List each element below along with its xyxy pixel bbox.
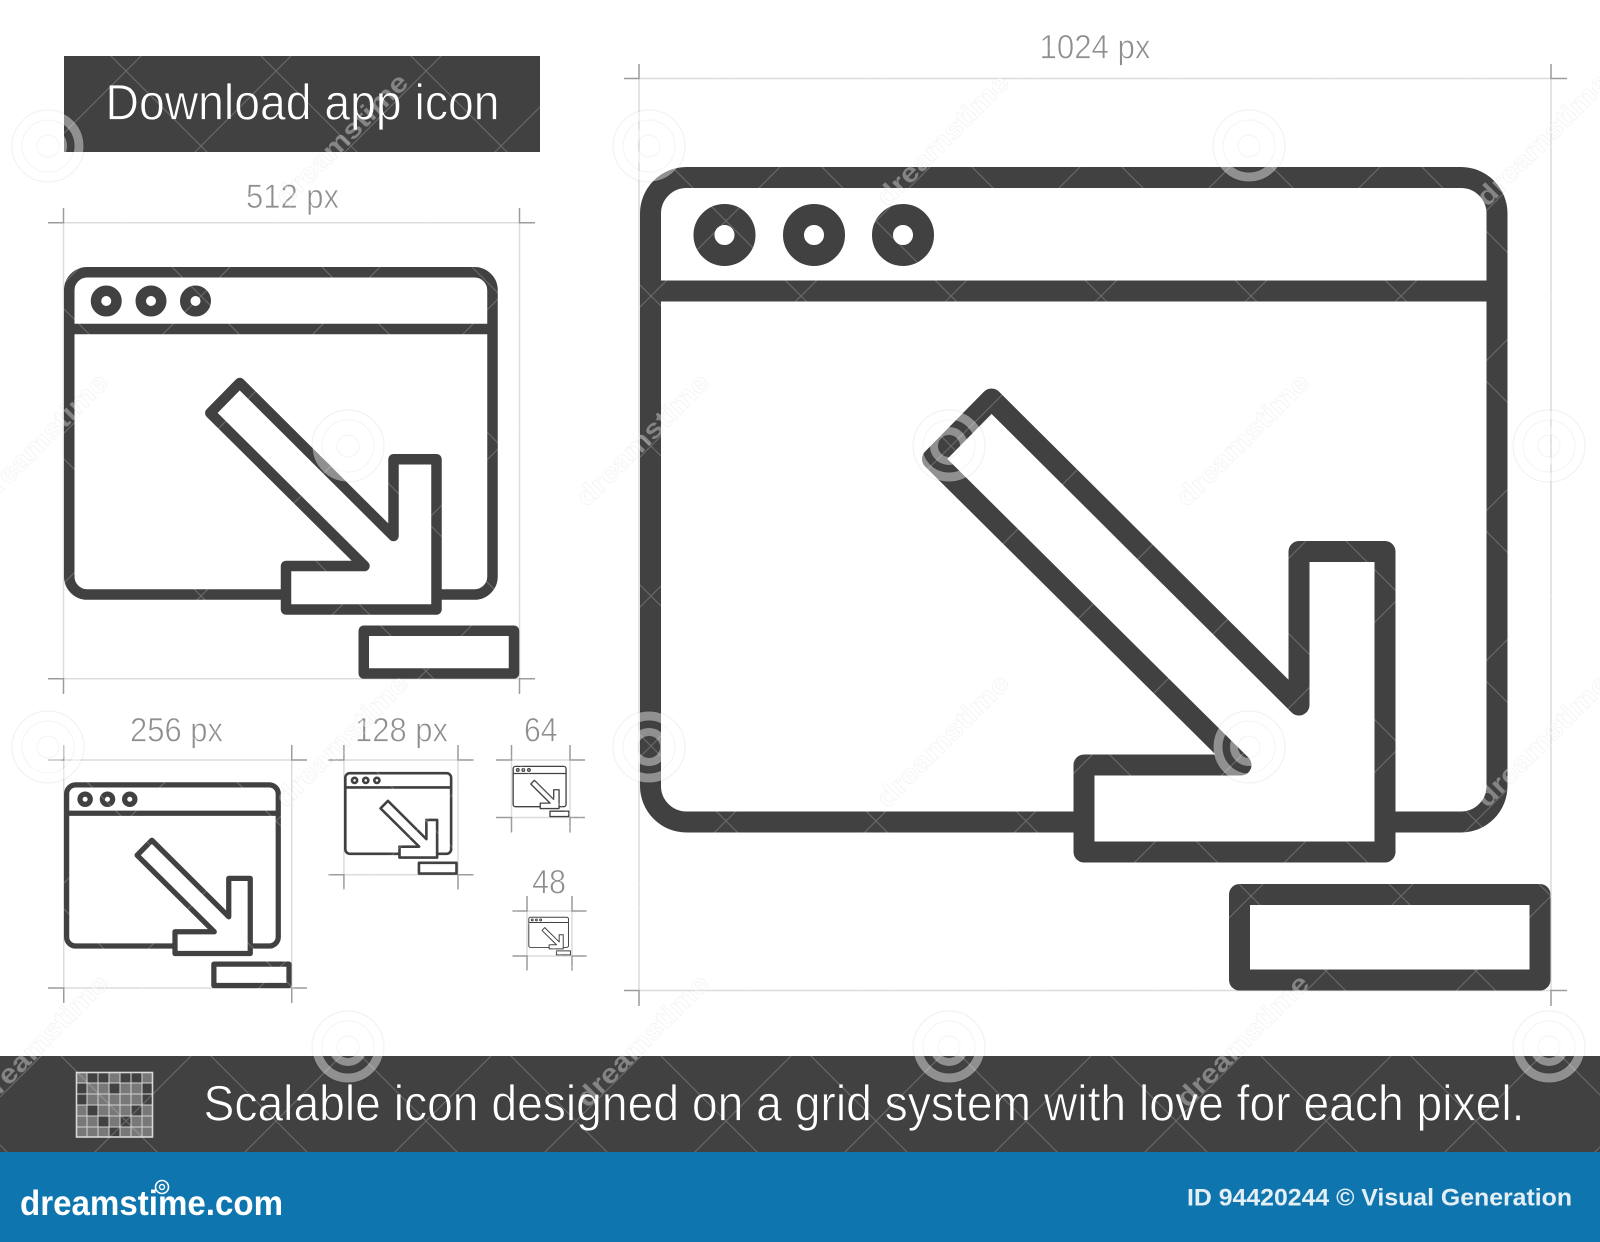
icon: pixel grid: [76, 1072, 153, 1138]
watermark overlay: dreamstime: [870, 67, 1015, 212]
icon: download app 1024 px: [650, 178, 1540, 980]
size label: 512 px: 512 px: [246, 178, 339, 216]
icon: download app 64 px: [513, 766, 569, 817]
dreamstime logo: dreamstime.com: [20, 1184, 283, 1223]
size guide frame: 128: [328, 745, 474, 890]
watermark overlay: dreamstime: [1470, 67, 1600, 212]
watermark overlay: dreamstime: [570, 367, 715, 512]
image id and author credit: ID 94420244 © Visual Generation: [1187, 1184, 1572, 1212]
watermark overlay: dreamstime: [570, 968, 715, 1113]
size label: 128 px: 128 px: [355, 712, 448, 750]
size label: 1024 px: 1024 px: [1040, 28, 1150, 66]
title banner: [64, 56, 540, 152]
icon: download app 512 px: [69, 272, 514, 674]
watermark overlay: dreamstime: [269, 67, 414, 212]
watermark overlay: dreamstime: [1170, 968, 1315, 1113]
blue footer bar: [0, 1152, 1600, 1242]
icon: download app 256 px: [67, 785, 289, 986]
caption text: Scalable icon designed on a grid system with love for each pixel.: [204, 1076, 1524, 1132]
size guide frame: 64: [496, 745, 585, 832]
size label: 64: 64: [524, 712, 558, 750]
watermark overlay: dreamstime: [269, 668, 414, 813]
watermark overlay: dreamstime: [1470, 668, 1600, 813]
size label: 256 px: 256 px: [130, 712, 223, 750]
size label: 48: 48: [532, 864, 566, 902]
size guide frame: 256: [48, 745, 307, 1003]
icon: download app 48 px: [529, 917, 570, 955]
size guide frame: 48: [512, 896, 586, 970]
watermark overlay: dreamstime: [1170, 367, 1315, 512]
title banner: Download app icon: [106, 74, 500, 130]
size guide frame: 1024: [624, 64, 1567, 1006]
watermark overlay: dreamstime: [870, 668, 1015, 813]
dark caption band: [0, 1056, 1600, 1152]
icon: download app 128 px: [345, 773, 456, 874]
size guide frame: 512: [48, 208, 535, 694]
